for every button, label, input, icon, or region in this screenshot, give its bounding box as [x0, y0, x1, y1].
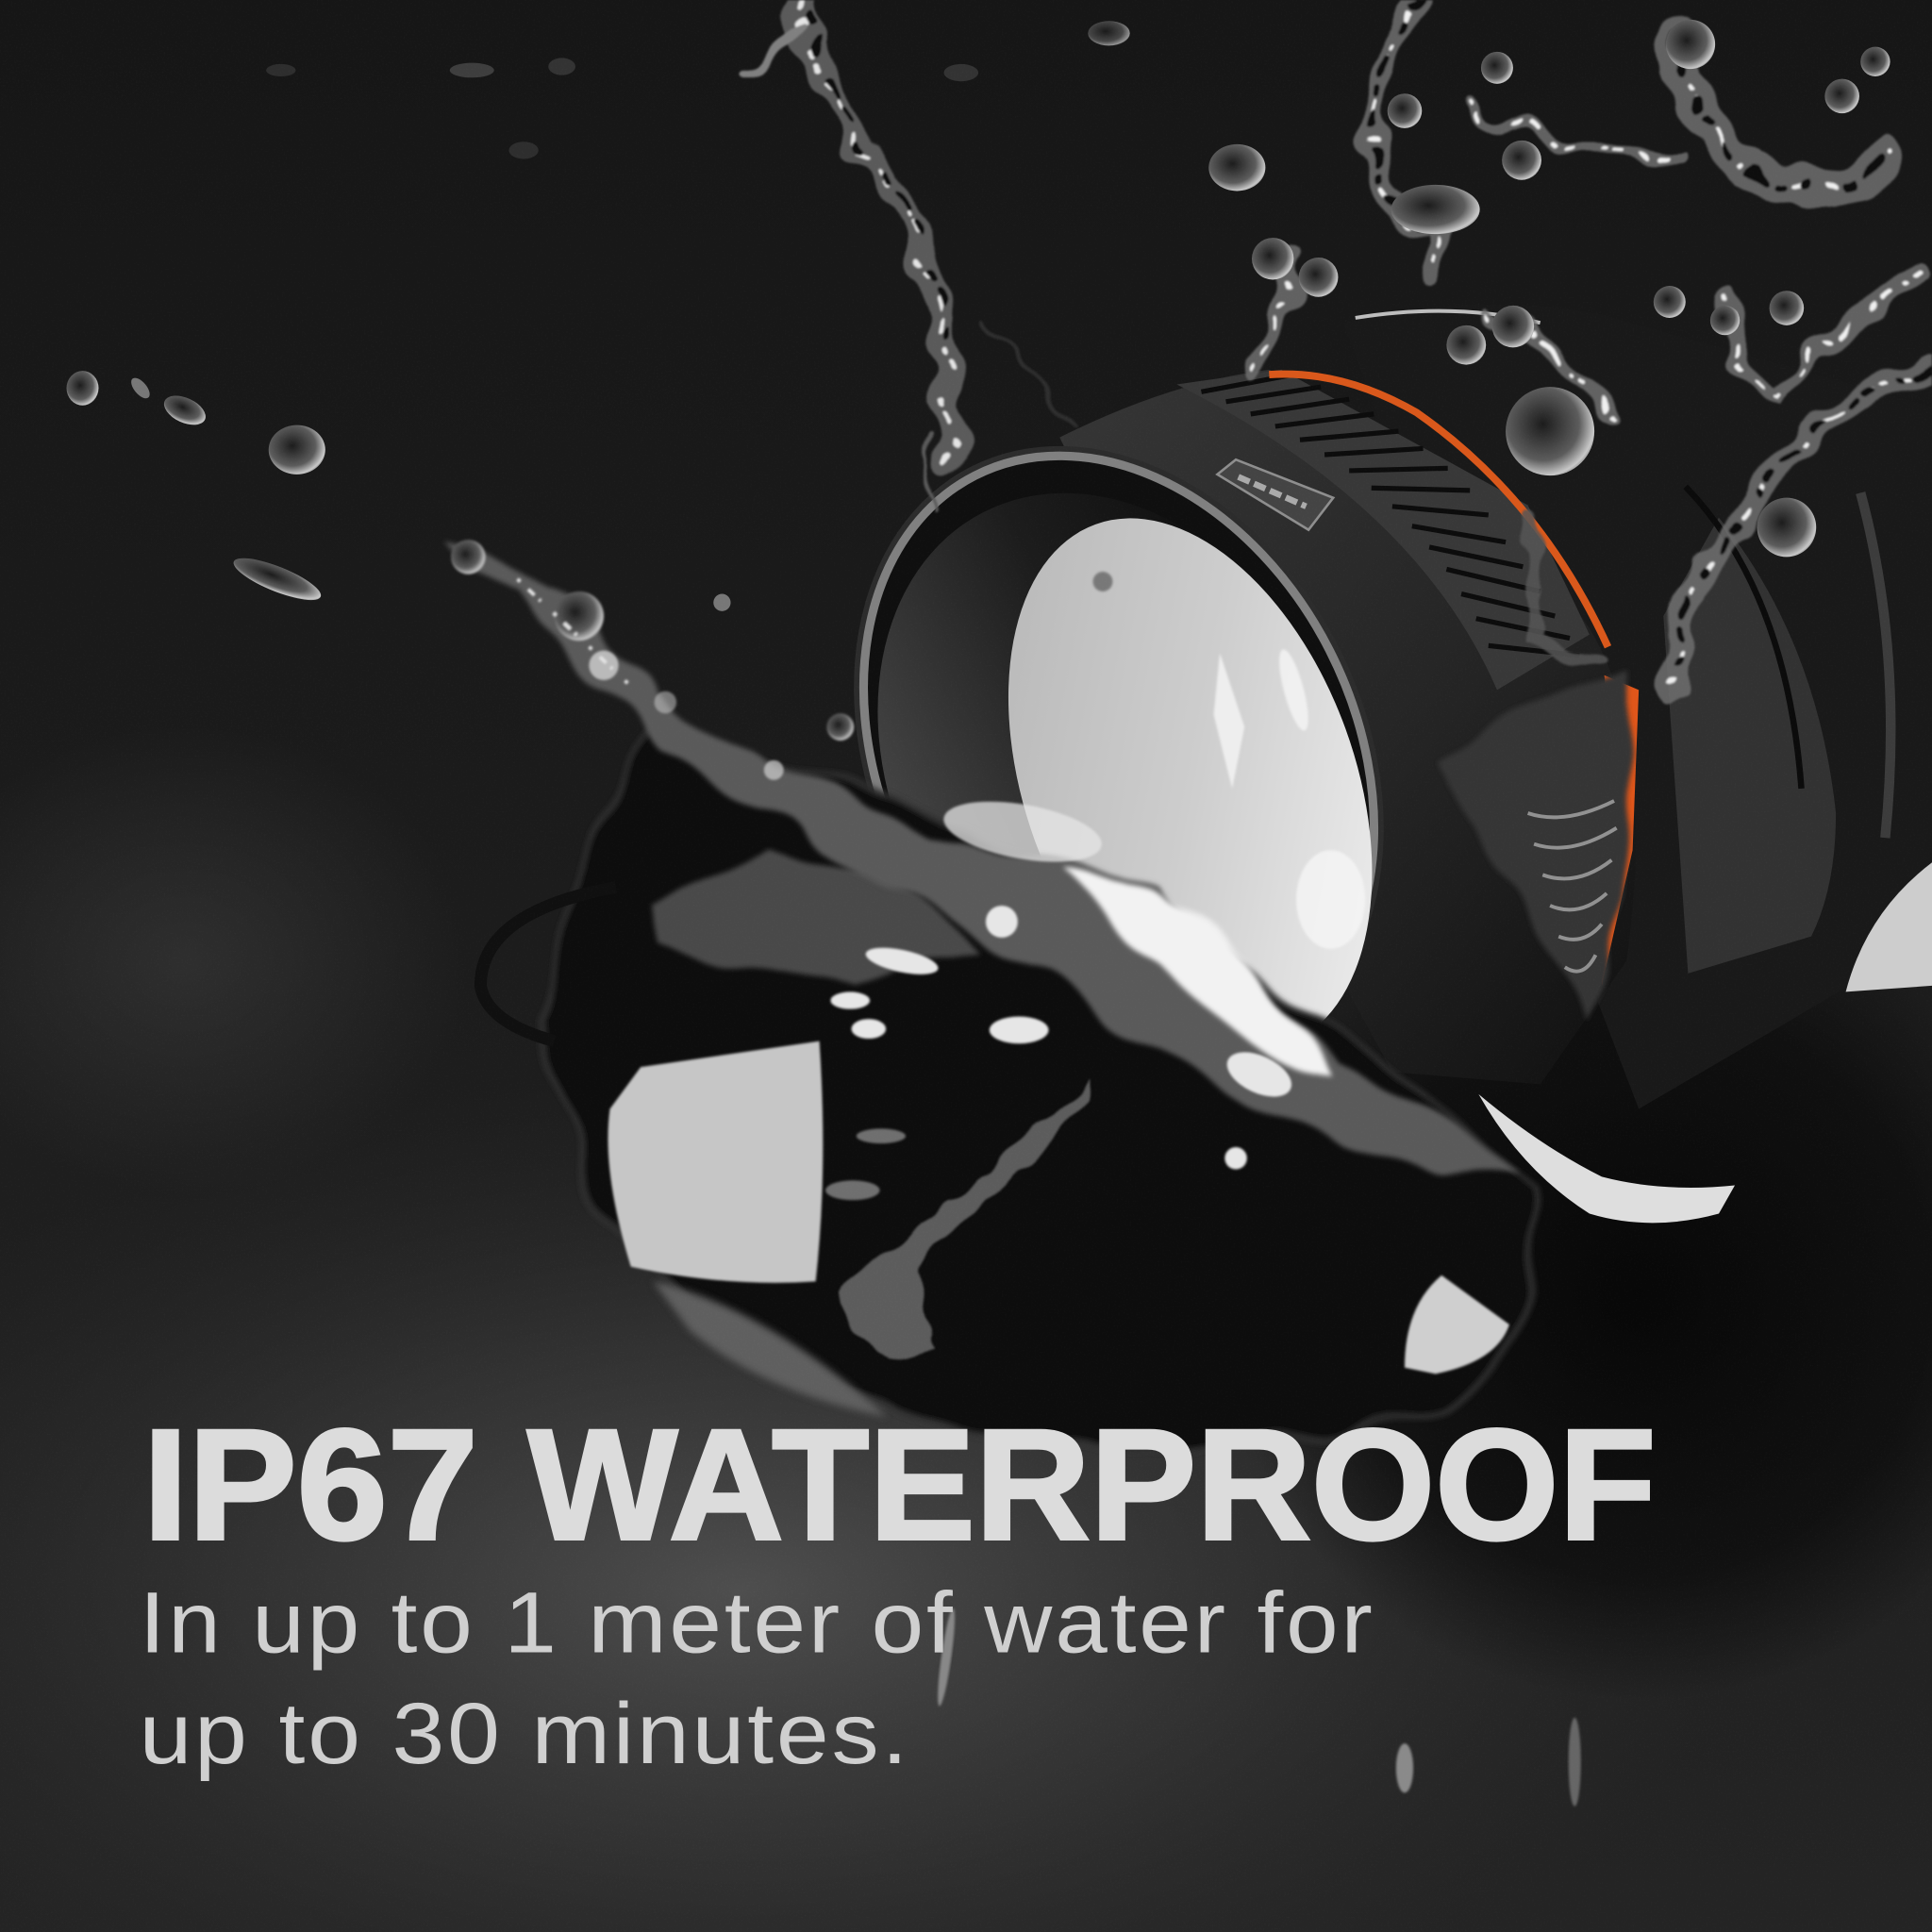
- crest droplets: [451, 540, 854, 780]
- bottom pool streak: [653, 1281, 887, 1417]
- translucent sheet highlights: [653, 850, 986, 986]
- lens water specks: [1093, 572, 1365, 949]
- white reflection stripe: [1478, 1094, 1735, 1223]
- main wave crest: [438, 540, 1516, 1173]
- water sheet splash: [438, 540, 1932, 1446]
- glowing lens: [941, 468, 1441, 1102]
- ring on surface: [480, 887, 616, 1041]
- orange trim lower: [1599, 675, 1639, 986]
- outer bezel: [751, 355, 1487, 1160]
- subtitle: up to 30 minutes.: [140, 1686, 910, 1782]
- ribbed grip: [1176, 370, 1590, 690]
- flashlight tail section: [1343, 304, 1932, 1109]
- orange trim ring: [1269, 375, 1607, 647]
- title: IP67: [143, 1397, 478, 1573]
- reflector interior: [786, 411, 1444, 1129]
- rear barrel highlights: [1356, 311, 1890, 974]
- foam on crest: [825, 791, 1298, 1200]
- subtitle: In up to 1 meter of water for: [140, 1575, 1375, 1672]
- flashlight head barrel: [1059, 370, 1636, 1084]
- water over head: [1436, 672, 1631, 1023]
- title: WATERPROOF: [527, 1397, 1656, 1573]
- splash: upper right: [1251, 0, 1932, 690]
- right lens reflection: [1846, 862, 1932, 991]
- brand badge: [1217, 459, 1333, 530]
- bright wave highlight: [1059, 869, 1337, 1084]
- water body outline: [542, 727, 1532, 1446]
- small refraction lower right: [1405, 1275, 1509, 1374]
- flashlight: [751, 304, 1932, 1160]
- splash: upper centre: [747, 0, 1070, 511]
- bezel highlight ring: [764, 368, 1474, 1147]
- ripple lines on water: [1528, 801, 1617, 972]
- falling water stream: [838, 1078, 1091, 1356]
- refraction of the lens: [608, 1041, 823, 1283]
